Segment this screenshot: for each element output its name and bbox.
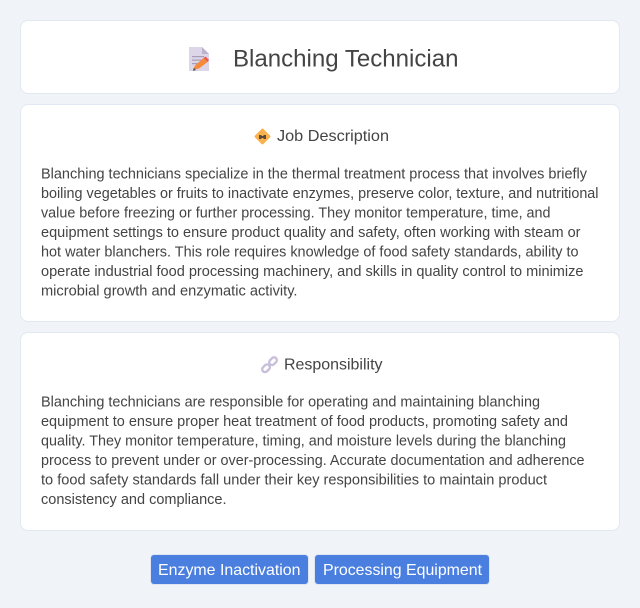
title: Blanching Technician	[233, 46, 458, 72]
panel: title header	[20, 20, 620, 94]
text block: job description: value before freezing or further processing. They monitor temperature, time, and	[41, 206, 550, 222]
tag: enzyme inactivation	[151, 555, 308, 584]
text block: responsibility: consistency and compliance.	[41, 492, 227, 508]
text block: job description: boiling vegetables or fruits to inactivate enzymes, preserve color, texture, and nutritional	[41, 186, 598, 202]
text block: job description	[41, 166, 598, 300]
text block: job description: equipment settings to ensure product quality and safety, often working with steam or	[41, 225, 581, 241]
text block: job description: microbial growth and enzymatic activity.	[41, 284, 298, 300]
text block: responsibility: equipment to ensure proper heat treatment of food products, promoting safety and	[41, 414, 568, 430]
text block: responsibility: process to prevent under or over-processing. Accurate documentation and adherence	[41, 453, 584, 469]
icon: chain link	[261, 356, 278, 374]
text block: job description: hot water blanchers. This role requires knowledge of food safety standards, ability to	[41, 244, 578, 260]
icon: orange diamond sign	[254, 128, 270, 144]
text block: responsibility: to food safety standards fall under their key responsibilities to maintain product	[41, 472, 547, 488]
text block: responsibility: quality. They monitor temperature, timing, and moisture levels during the blanching	[41, 434, 566, 450]
text block: responsibility	[41, 394, 584, 508]
text block: job description: Blanching technicians specialize in the thermal treatment process that involves briefly	[41, 166, 588, 182]
text block: responsibility: Blanching technicians are responsible for operating and maintaining blanching	[41, 394, 540, 410]
tag: enzyme inactivation: Enzyme Inactivation	[158, 562, 300, 579]
tag: processing equipment	[315, 555, 489, 584]
panel: job description	[20, 104, 620, 322]
tag: processing equipment: Processing Equipment	[323, 562, 483, 579]
icon: document with pencil	[189, 47, 209, 71]
panel: responsibility	[20, 332, 620, 531]
heading: job description: Job Description	[277, 128, 389, 145]
text block: job description: operate industrial food processing machinery, and skills in quality control to minimize	[41, 264, 584, 280]
heading: responsibility: Responsibility	[284, 356, 382, 374]
